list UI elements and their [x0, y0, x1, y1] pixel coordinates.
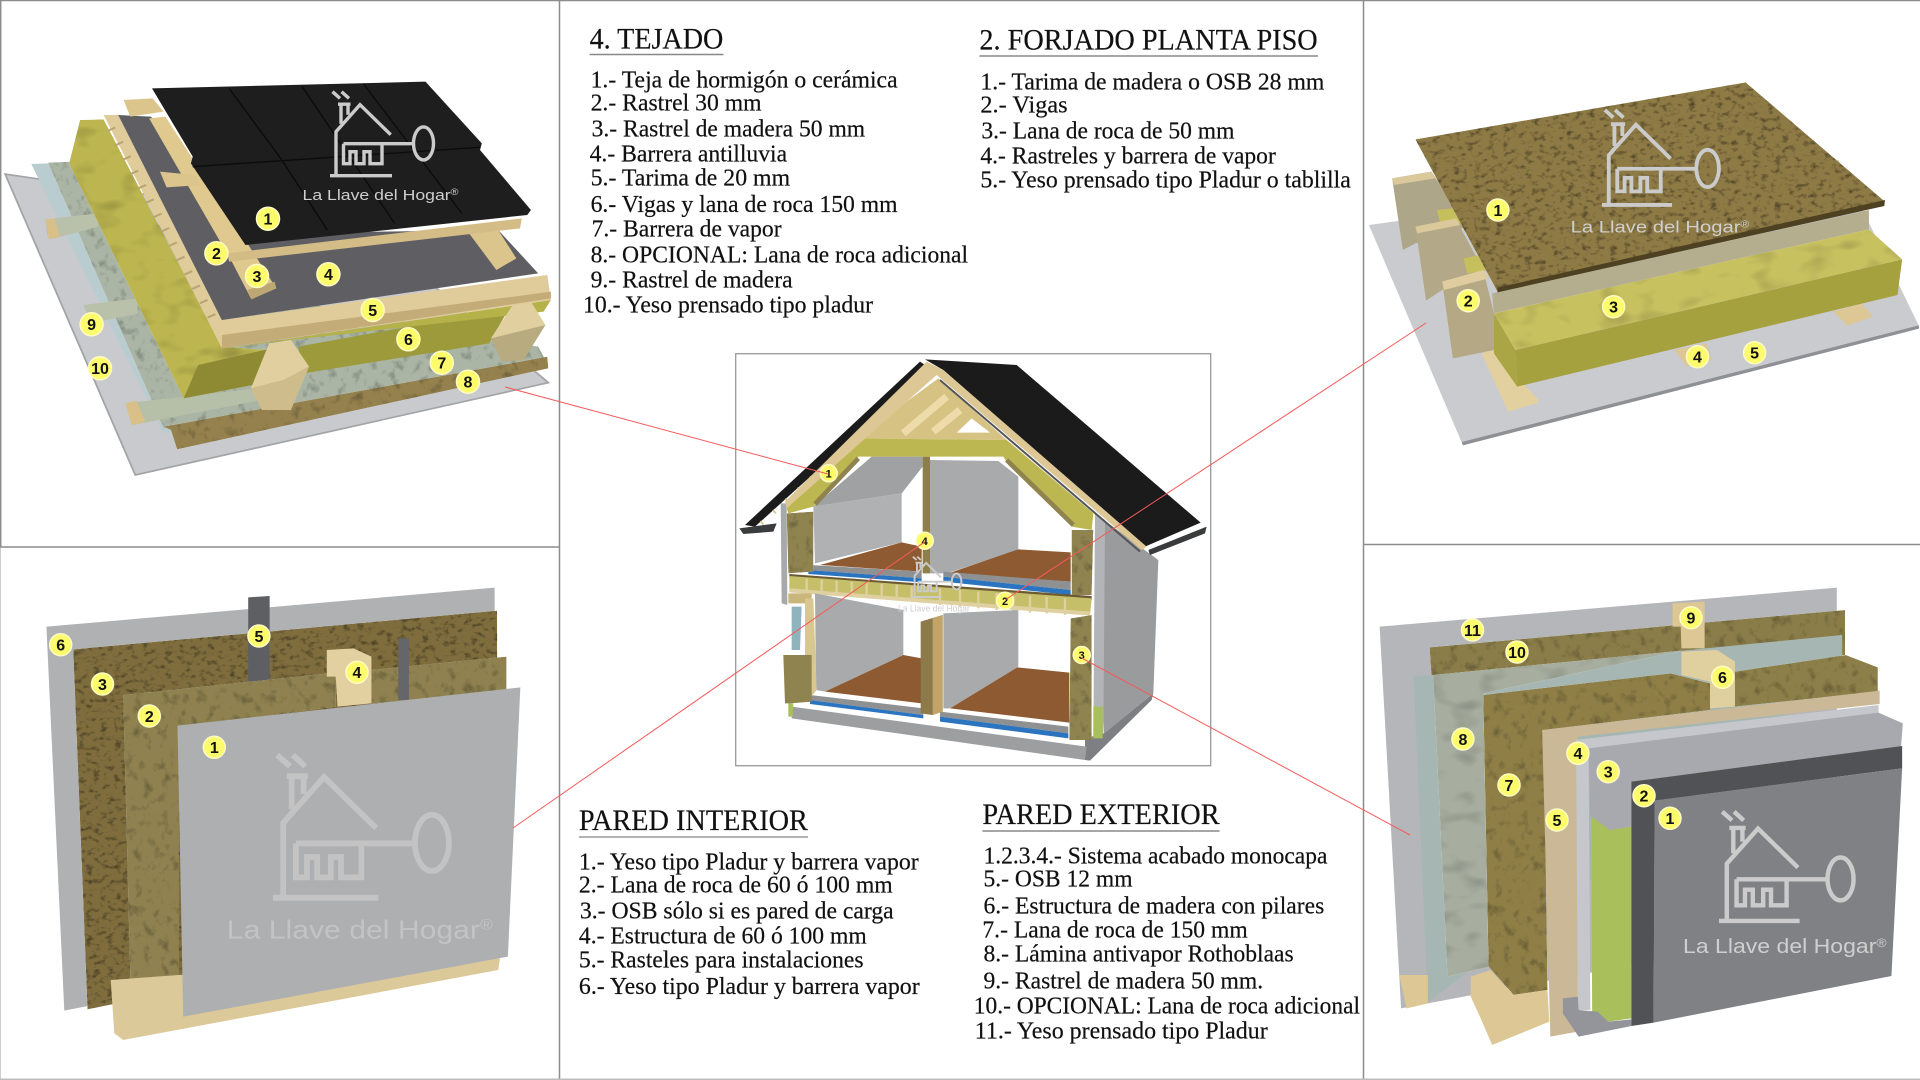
number markers: exterior wall: 2 [1640, 788, 1649, 806]
number markers: roof: 6 [404, 332, 413, 349]
number markers: exterior wall: 6 [1718, 670, 1727, 687]
text block: tejado: 5.- Tarima de 20 mm [591, 165, 790, 191]
text block: pared exterior: 5.- OSB 12 mm [984, 867, 1133, 893]
text block: pared interior: 2.- Lana de roca de 60 ó 100 mm [579, 873, 893, 899]
number markers: exterior wall [1452, 607, 1734, 831]
text block: pared interior [579, 804, 920, 1000]
number markers: interior wall: 6 [56, 638, 65, 654]
text block: pared exterior: 11.- Yeso prensado tipo Pladur [975, 1019, 1268, 1045]
number markers: exterior wall: 11 [1464, 623, 1481, 640]
watermark text: ® [451, 187, 459, 197]
connector: floor [1005, 323, 1426, 600]
watermark text: La Llave del Hogar [898, 604, 970, 614]
text block: pared exterior: 10.- OPCIONAL: Lana de roca adicional [974, 993, 1360, 1019]
panel: upper floor build-up detail [1369, 82, 1919, 445]
watermark text: La Llave del Hogar [1571, 218, 1713, 237]
number markers: roof: 7 [437, 356, 446, 372]
text block: pared exterior: 8.- Lámina antivapor Rothoblaas [984, 941, 1294, 967]
text block: pared exterior: 7.- Lana de roca de 150 mm [982, 917, 1248, 943]
number markers: upper floor: 2 [1464, 294, 1473, 310]
number markers: house [820, 465, 1090, 664]
number markers: exterior wall: 5 [1553, 813, 1562, 830]
number markers: interior wall: 2 [145, 709, 154, 726]
number markers: roof: 1 [264, 212, 273, 228]
number markers: exterior wall: 7 [1505, 778, 1514, 795]
number markers: upper floor: 1 [1493, 203, 1502, 220]
text block: tejado: 9.- Rastrel de madera [591, 267, 793, 293]
text block: pared interior: 5.- Rasteles para instalaciones [579, 947, 864, 973]
number markers: roof: 4 [324, 267, 333, 284]
text block: tejado: 2.- Rastrel 30 mm [591, 91, 762, 117]
text block: pared exterior: 9.- Rastrel de madera 50 mm. [984, 969, 1263, 995]
text block: tejado: 4.- Barrera antilluvia [590, 141, 787, 167]
number markers: exterior wall: 10 [1508, 645, 1526, 662]
connector: roof [505, 387, 828, 474]
text block: tejado [583, 22, 968, 319]
number markers: interior wall [50, 625, 368, 758]
text block: forjado planta piso: 2.- Vigas [980, 93, 1068, 119]
number markers: roof: 3 [253, 269, 262, 286]
number markers: interior wall: 1 [210, 740, 219, 757]
panel: exterior wall detail [1380, 588, 1903, 1045]
connector lines [505, 323, 1426, 835]
number markers: upper floor: 3 [1609, 300, 1618, 316]
number markers: roof: 9 [87, 317, 96, 334]
text block: forjado planta piso [979, 23, 1351, 193]
watermark logo [1719, 812, 1854, 921]
panel: central house cutaway [736, 354, 1211, 766]
text block: forjado planta piso: 1.- Tarima de madera o OSB 28 mm [980, 69, 1325, 95]
number markers: house: 4 [922, 536, 929, 548]
panel: interior wall detail [46, 588, 520, 1040]
number markers: exterior wall: 1 [1666, 811, 1675, 828]
text block: forjado planta piso: 5.- Yeso prensado tipo Pladur o tablilla [980, 167, 1351, 193]
text block: tejado: 7.- Barrera de vapor [592, 217, 782, 243]
text block: pared exterior [974, 798, 1360, 1045]
watermark logo [330, 92, 434, 176]
number markers: exterior wall: 3 [1604, 764, 1613, 782]
text block: forjado planta piso: 3.- Lana de roca de 50 mm [981, 119, 1235, 145]
number markers: roof: 5 [368, 303, 377, 320]
text block: tejado: 3.- Rastrel de madera 50 mm [592, 117, 865, 143]
text block: forjado planta piso: 4.- Rastreles y barrera de vapor [980, 143, 1276, 169]
watermark text: ® [1741, 220, 1750, 231]
number markers: interior wall: 3 [98, 677, 107, 694]
watermark logo [273, 755, 449, 898]
watermark text: La Llave del Hogar [302, 187, 428, 204]
text block: tejado: 1.- Teja de hormigón o cerámica [591, 67, 898, 93]
text block: pared exterior: 6.- Estructura de madera con pilares [984, 893, 1324, 919]
number markers: roof [80, 207, 479, 393]
watermark logo [912, 557, 961, 597]
number markers: exterior wall: 9 [1687, 610, 1696, 628]
heading: pared exterior: PARED EXTERIOR [982, 798, 1220, 831]
text block: pared exterior: 1.2.3.4.- Sistema acabado monocapa [984, 843, 1328, 869]
number markers: interior wall: 4 [353, 665, 362, 682]
number markers: exterior wall: 4 [1573, 746, 1582, 763]
number markers: roof: 10 [91, 361, 109, 378]
watermark text: La Llave del Hogar [1683, 936, 1851, 958]
connector: exterior wall [1082, 658, 1410, 835]
watermark logo [1602, 110, 1719, 205]
number markers: house: 3 [1079, 650, 1085, 662]
watermark text: ® [1876, 936, 1887, 950]
text block: pared interior: 4.- Estructura de 60 ó 100 mm [579, 923, 867, 949]
number markers: upper floor [1457, 199, 1766, 368]
text block: tejado: 8.- OPCIONAL: Lana de roca adicional [591, 242, 968, 268]
number markers: house: 1 [826, 468, 832, 480]
text block: tejado: 10.- Yeso prensado tipo pladur [583, 293, 873, 319]
number markers: interior wall: 5 [254, 629, 263, 646]
number markers: upper floor: 4 [1693, 350, 1702, 366]
number markers: roof: 2 [212, 246, 221, 263]
text block: pared interior: 6.- Yeso tipo Pladur y barrera vapor [579, 974, 920, 1000]
number markers: exterior wall: 8 [1458, 732, 1467, 749]
connector: interior wall [513, 542, 925, 828]
text block: tejado: 6.- Vigas y lana de roca 150 mm [591, 192, 898, 218]
number markers: house: 2 [1002, 596, 1008, 608]
text block: pared interior: 3.- OSB sólo si es pared de carga [580, 899, 894, 925]
heading: tejado: 4. TEJADO [590, 22, 723, 55]
watermark text: La Llave del Hogar [227, 914, 445, 944]
number markers: roof: 8 [464, 374, 473, 392]
number markers: upper floor: 5 [1750, 346, 1759, 362]
panel: roof build-up detail [5, 82, 551, 475]
heading: forjado planta piso: 2. FORJADO PLANTA PISO [979, 23, 1318, 56]
heading: pared interior: PARED INTERIOR [579, 804, 808, 837]
text block: pared interior: 1.- Yeso tipo Pladur y barrera vapor [579, 849, 919, 875]
watermark text: ® [480, 916, 493, 933]
